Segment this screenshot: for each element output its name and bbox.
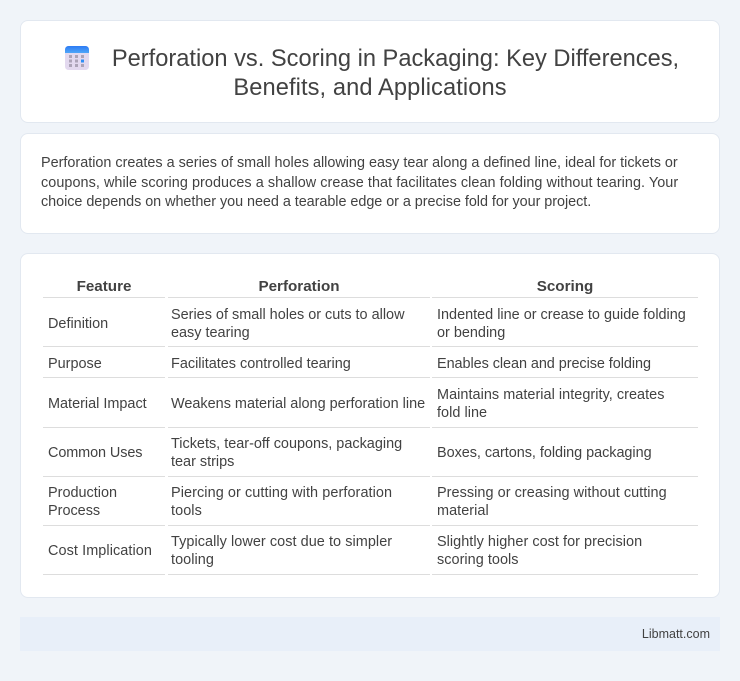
footer bar xyxy=(20,617,720,651)
intro paragraph: choice depends on whether you need a tearable edge or a precise fold for your project. xyxy=(41,194,591,210)
row: cost implication: tooling xyxy=(171,552,214,568)
row: purpose: Purpose xyxy=(48,356,102,372)
row: production process: Process xyxy=(48,503,100,519)
panel: comparison table card xyxy=(20,253,720,598)
row: production process: tools xyxy=(171,503,202,519)
column heading: perforation: Perforation xyxy=(258,278,340,295)
row: definition: Series of small holes or cuts to allow xyxy=(171,307,405,323)
panel: intro text card xyxy=(20,133,720,234)
footer source text: Libmatt.com xyxy=(642,627,710,641)
row: material impact xyxy=(48,387,664,421)
row: production process: Production xyxy=(48,485,117,501)
row: definition: or bending xyxy=(437,325,505,341)
row: production process xyxy=(48,485,667,519)
row: purpose xyxy=(48,356,651,372)
title xyxy=(112,46,679,101)
intro paragraph: Perforation creates a series of small holes allowing easy tear along a defined line, ideal for tickets or xyxy=(41,155,678,171)
row: production process: material xyxy=(437,503,489,519)
row: purpose: Facilitates controlled tearing xyxy=(171,356,351,372)
row: cost implication: Typically lower cost due to simpler xyxy=(171,534,392,550)
row: cost implication: Cost Implication xyxy=(48,543,152,559)
row: definition: Indented line or crease to guide folding xyxy=(437,307,686,323)
row: definition: Definition xyxy=(48,316,108,332)
row: cost implication: Slightly higher cost for precision xyxy=(437,534,642,550)
intro paragraph: coupons, while scoring produces a shallow crease that facilitates clean folding without tearing. Your xyxy=(41,175,678,191)
row: common uses: tear strips xyxy=(171,454,234,470)
row: material impact: Weakens material along perforation line xyxy=(171,396,425,412)
panel: header card xyxy=(20,20,720,123)
column heading: feature: Feature xyxy=(77,278,131,295)
row: definition xyxy=(48,307,686,341)
title: Benefits, and Applications xyxy=(233,75,507,101)
row: production process: Piercing or cutting with perforation xyxy=(171,485,392,501)
row: common uses: Boxes, cartons, folding packaging xyxy=(437,445,652,461)
row: common uses: Tickets, tear-off coupons, packaging xyxy=(171,436,402,452)
row: common uses: Common Uses xyxy=(48,445,142,461)
row: production process: Pressing or creasing without cutting xyxy=(437,485,667,501)
icon: calendar grid xyxy=(65,46,89,70)
row: common uses xyxy=(48,436,652,470)
row: definition: easy tearing xyxy=(171,325,250,341)
column heading: scoring: Scoring xyxy=(537,278,593,295)
row: material impact: fold line xyxy=(437,405,487,421)
row: cost implication: scoring tools xyxy=(437,552,519,568)
row: material impact: Material Impact xyxy=(48,396,147,412)
intro paragraph xyxy=(41,155,678,210)
title: Perforation vs. Scoring in Packaging: Key Differences, xyxy=(112,46,679,72)
row: material impact: Maintains material integrity, creates xyxy=(437,387,664,403)
row: cost implication xyxy=(48,534,642,568)
table header row xyxy=(77,278,593,295)
row: purpose: Enables clean and precise folding xyxy=(437,356,651,372)
